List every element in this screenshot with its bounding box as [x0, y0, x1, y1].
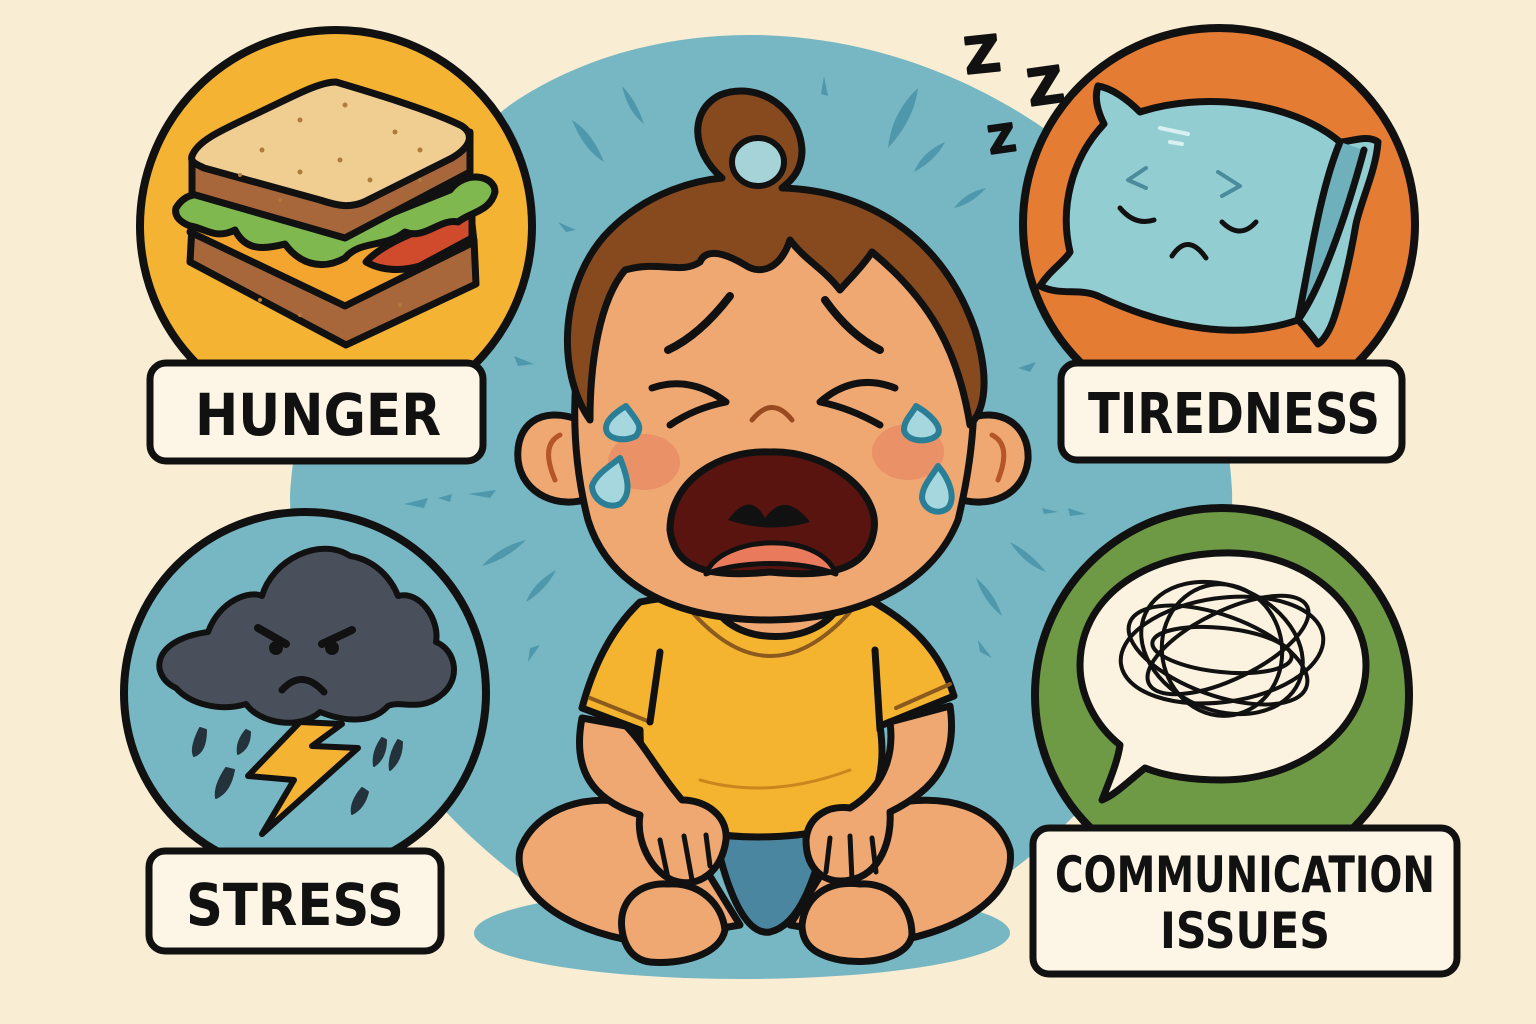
baby shirt — [582, 593, 954, 837]
tiredness label box — [1061, 363, 1402, 460]
crying baby — [518, 91, 1028, 963]
baby hair — [567, 91, 984, 425]
icon: sleep Z letters: Z — [961, 24, 1003, 86]
cheeks — [608, 434, 680, 490]
stress circle — [124, 512, 486, 874]
icon: sleep Z letters: Z — [985, 116, 1019, 163]
panel: hunger — [140, 30, 532, 461]
tiredness circle — [1023, 28, 1415, 420]
diaper — [712, 820, 830, 932]
hunger circle — [140, 30, 532, 422]
tiredness label: TIREDNESS — [1088, 382, 1380, 447]
icon: raindrops — [193, 728, 402, 814]
icon: sleep Z letters — [961, 24, 1068, 163]
hair curl — [732, 138, 784, 186]
icon: speech bubble with scribble — [1080, 553, 1366, 800]
hunger label: HUNGER — [195, 381, 441, 449]
baby feet — [622, 883, 912, 963]
baby neck — [712, 596, 842, 636]
stress label: STRESS — [186, 871, 404, 939]
icon: sandwich — [176, 82, 495, 345]
hunger label box — [150, 363, 483, 461]
stress label box — [149, 851, 441, 951]
baby fingers — [660, 835, 876, 880]
eyebrows and closed eyes — [652, 296, 895, 425]
floor shadow — [474, 887, 1010, 979]
baby legs — [519, 800, 1011, 942]
tears — [592, 406, 952, 512]
motion marks around the baby — [404, 76, 1086, 662]
tongue — [706, 543, 836, 574]
icon: sleep Z letters: Z — [1024, 55, 1068, 118]
baby head — [575, 190, 974, 620]
communication label: COMMUNICATION — [1055, 846, 1435, 904]
uvula — [728, 504, 810, 528]
panel: communication issues — [1033, 508, 1457, 974]
baby ears — [518, 415, 1028, 502]
communication circle — [1035, 508, 1409, 882]
communication label box — [1033, 828, 1457, 974]
communication label: ISSUES — [1160, 902, 1330, 960]
bread speckles — [238, 102, 422, 317]
communication label — [1055, 846, 1435, 960]
panel: tiredness — [1023, 28, 1415, 460]
crying mouth — [670, 452, 874, 574]
icon: angry storm cloud — [159, 549, 454, 834]
background blue blob — [290, 35, 1232, 910]
panel: stress — [124, 512, 486, 951]
icon: sad pillow — [1040, 86, 1378, 344]
baby arms and hands — [579, 706, 952, 883]
